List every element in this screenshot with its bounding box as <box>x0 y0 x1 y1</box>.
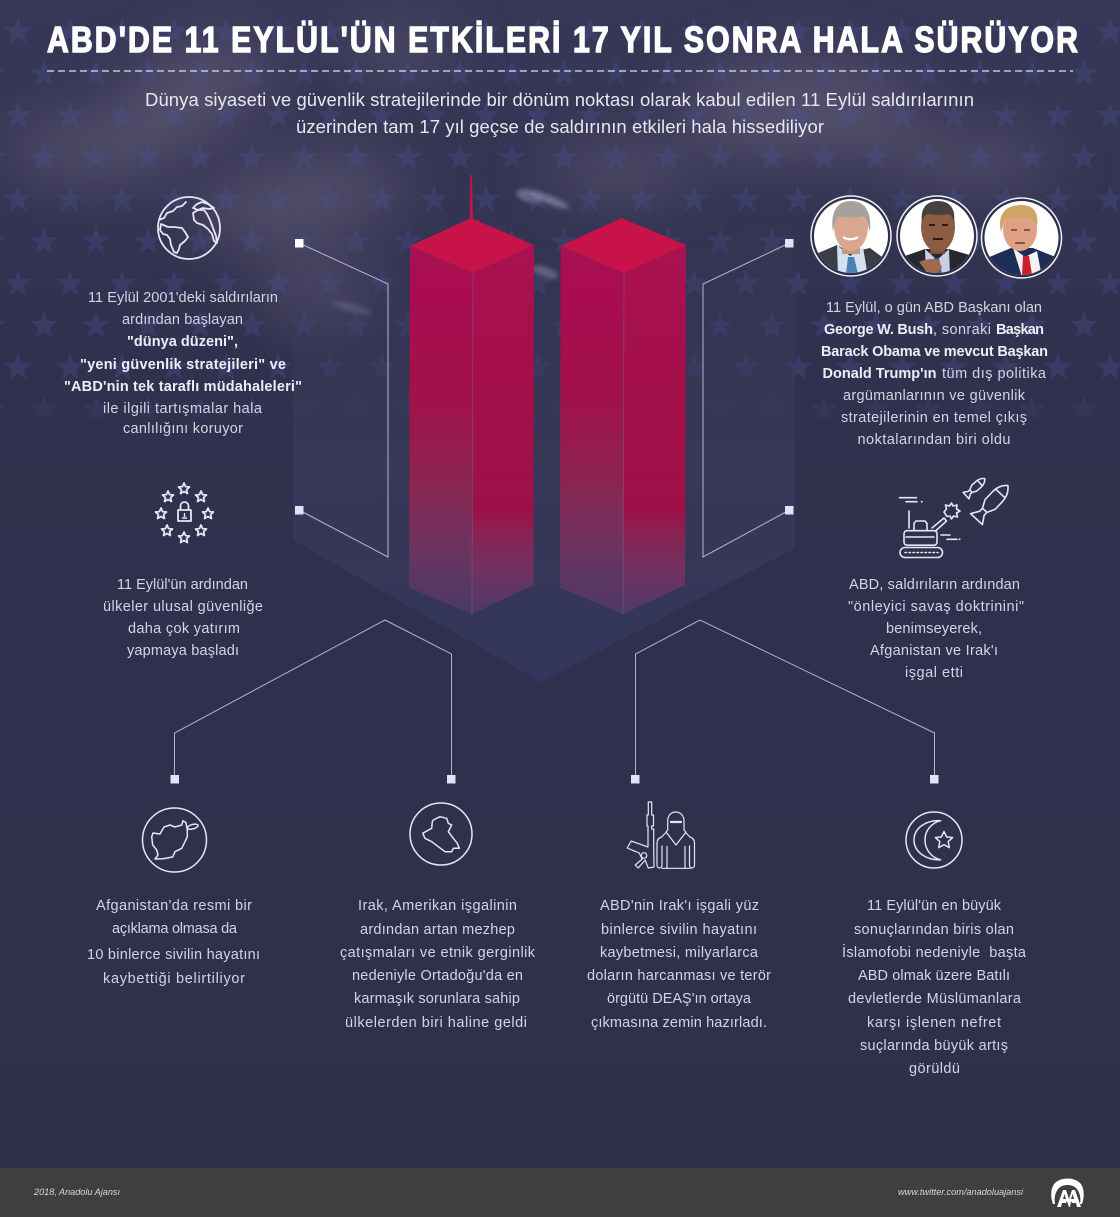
text: war doctrine: Afganistan ve Irak'ı <box>870 643 998 659</box>
icon: armed militant <box>627 802 694 868</box>
text: presidents: , sonraki <box>933 322 991 338</box>
text: Islamophobia: suçlarında büyük artış <box>860 1038 1008 1054</box>
portrait: Obama <box>897 196 977 278</box>
text: national security: ülkeler ulusal güvenliğe <box>103 599 263 615</box>
text: Iraq: nedeniyle Ortadoğu'da en <box>352 968 523 984</box>
text: war doctrine: ABD, saldırıların ardından <box>849 577 1020 593</box>
text: Iraq invasion <box>587 898 771 1031</box>
text: presidents: noktalarından biri oldu <box>858 432 1010 448</box>
text: Islamophobia <box>842 898 1027 1077</box>
text: national security: daha çok yatırım <box>128 621 240 637</box>
icon: crescent and star <box>906 812 962 868</box>
text: Afghanistan: açıklama olmasa da <box>112 921 238 937</box>
text: world order debates: ile ilgili tartışmalar hala <box>103 401 263 417</box>
connector: right <box>703 239 794 557</box>
twin towers <box>409 175 686 614</box>
text: Islamophobia: karşı işlenen nefret <box>867 1015 1001 1031</box>
text: world order debates: "yeni güvenlik stratejileri" ve <box>80 357 286 373</box>
text: Iraq invasion: doların harcanması ve terör <box>587 968 771 984</box>
text: national security: 11 Eylül'ün ardından <box>117 577 248 593</box>
icon: Afghanistan map <box>142 808 206 872</box>
text: Afghanistan <box>87 898 260 987</box>
text: world order debates: ardından başlayan <box>122 312 243 328</box>
storm clouds <box>0 17 1060 320</box>
text: war doctrine: benimseyerek, <box>886 621 982 637</box>
text: Iraq: karmaşık sorunlara sahip <box>354 991 520 1007</box>
text: Iraq invasion: binlerce sivilin hayatını <box>601 922 757 938</box>
connector: bottom left <box>170 620 456 784</box>
icon: Iraq map <box>410 803 472 865</box>
text: war doctrine: "önleyici savaş doktrinini" <box>848 599 1024 615</box>
star pattern <box>0 0 1120 440</box>
text: world order debates: canlılığını koruyor <box>123 421 243 437</box>
right tower <box>560 218 686 614</box>
footer: 2018, Anadolu Ajansı <box>33 1187 120 1198</box>
text: presidents: Donald Trump'ın <box>822 366 936 382</box>
isometric platform <box>293 200 795 682</box>
text: presidents: George W. Bush <box>824 322 933 338</box>
icon: globe <box>158 197 220 259</box>
portraits: presidents <box>811 196 1062 280</box>
text: presidents: stratejilerinin en temel çıkış <box>841 410 1027 426</box>
text: Islamophobia: görüldü <box>909 1061 960 1077</box>
subtitle: Dünya siyaseti ve güvenlik stratejilerinde bir dönüm noktası olarak kabul edilen 11 Eylül saldırılarının <box>145 89 974 110</box>
text: Iraq: ülkelerden biri haline geldi <box>345 1015 527 1031</box>
icon: lock with stars <box>156 483 214 542</box>
text: presidents: Barack Obama ve mevcut Başkan <box>821 344 1048 360</box>
logo: AA <box>1051 1178 1084 1207</box>
footer: www.twitter.com/anadoluajansi <box>898 1187 1024 1198</box>
text: Iraq: Irak, Amerikan işgalinin <box>358 898 517 914</box>
text: world order debates: 11 Eylül 2001'deki saldırıların <box>88 290 278 306</box>
text: Islamophobia: devletlerde Müslümanlara <box>848 991 1022 1007</box>
text: presidents <box>821 300 1048 448</box>
text: Iraq invasion: çıkmasına zemin hazırladı. <box>591 1015 767 1031</box>
portrait: Bush <box>811 196 891 280</box>
subtitle <box>145 89 974 137</box>
text: national security: yapmaya başladı <box>127 643 239 659</box>
connector: bottom right <box>631 620 938 784</box>
text: presidents: Başkan <box>996 322 1044 338</box>
text: national security <box>103 577 263 659</box>
portrait: Trump <box>982 198 1062 278</box>
text: Afghanistan: kaybettiği belirtiliyor <box>103 971 245 987</box>
text: Iraq: çatışmaları ve etnik gerginlik <box>340 945 536 961</box>
text: world order debates: "ABD'nin tek taraflı müdahaleleri" <box>64 379 302 395</box>
text: war doctrine <box>848 577 1024 681</box>
text: presidents: 11 Eylül, o gün ABD Başkanı olan <box>826 300 1042 316</box>
text: Islamophobia: sonuçlarından biris olan <box>854 922 1014 938</box>
icon: tank and bombs <box>900 475 1014 558</box>
text: world order debates <box>64 290 302 437</box>
text: presidents: argümanlarının ve güvenlik <box>843 388 1026 404</box>
footer <box>0 1168 1120 1217</box>
text: Islamophobia: ABD olmak üzere Batılı <box>858 968 1010 984</box>
text: Afghanistan: Afganistan'da resmi bir <box>96 898 252 914</box>
text: presidents: tüm dış politika <box>942 366 1047 382</box>
text: Iraq: ardından artan mezhep <box>360 922 515 938</box>
text: Iraq <box>340 898 536 1031</box>
text: Islamophobia: İslamofobi nedeniyle başta <box>842 943 1027 961</box>
text: war doctrine: işgal etti <box>905 665 963 681</box>
text: Afghanistan: 10 binlerce sivilin hayatını <box>87 947 260 963</box>
text: Iraq invasion: kaybetmesi, milyarlarca <box>600 945 759 961</box>
subtitle: üzerinden tam 17 yıl geçse de saldırının etkileri hala hissediliyor <box>296 116 824 137</box>
text: world order debates: "dünya düzeni", <box>127 334 238 350</box>
text: Islamophobia: 11 Eylül'ün en büyük <box>867 898 1002 914</box>
text: Iraq invasion: örgütü DEAŞ'ın ortaya <box>607 991 752 1007</box>
text: Iraq invasion: ABD'nin Irak'ı işgali yüz <box>600 898 759 914</box>
left tower <box>409 175 534 614</box>
connector: left <box>295 239 388 557</box>
